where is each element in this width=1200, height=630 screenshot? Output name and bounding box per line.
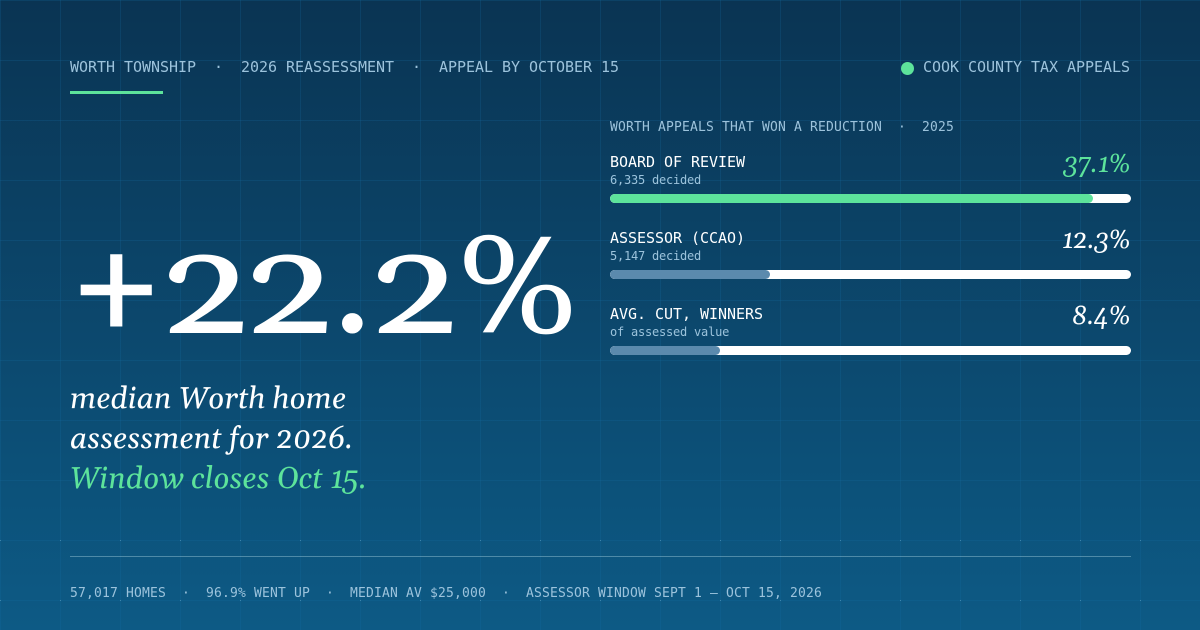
row 2 label: ASSESSOR (CCAO) bbox=[610, 229, 745, 247]
footer divider bbox=[70, 556, 1131, 557]
row 1 value: 37.1% bbox=[1063, 148, 1130, 181]
row 2 bar bbox=[610, 270, 1131, 279]
row 3 bar bbox=[610, 346, 1131, 355]
row 2 sublabel: 5,147 decided bbox=[610, 249, 701, 263]
status dot bbox=[901, 62, 914, 75]
header right text: COOK COUNTY TAX APPEALS bbox=[923, 58, 1130, 76]
headline stat: % bbox=[456, 205, 579, 380]
row 3 sublabel: of assessed value bbox=[610, 325, 729, 339]
accent rule bbox=[70, 91, 163, 94]
row 3 value: 8.4% bbox=[1072, 300, 1130, 333]
row 1 sublabel: 6,335 decided bbox=[610, 173, 701, 187]
headline stat: 2 bbox=[245, 211, 335, 378]
header left text: WORTH TOWNSHIP · 2026 REASSESSMENT · APPEAL BY OCTOBER 15 bbox=[70, 58, 619, 76]
row 1 label: BOARD OF REVIEW bbox=[610, 153, 745, 171]
headline stat bbox=[68, 194, 579, 384]
row 1 bar bbox=[610, 194, 1131, 203]
footer stats: 57,017 HOMES · 96.9% WENT UP · MEDIAN AV $25,000 · ASSESSOR WINDOW SEPT 1 – OCT 15, 2026 bbox=[70, 586, 822, 601]
headline stat: 2 bbox=[161, 211, 252, 378]
headline stat: 2 bbox=[369, 211, 460, 378]
headline stat: + . bbox=[68, 194, 372, 384]
row 3 label: AVG. CUT, WINNERS bbox=[610, 305, 763, 323]
subhead: median Worth home assessment for 2026. Window closes Oct 15. bbox=[70, 381, 367, 499]
row 2 value: 12.3% bbox=[1062, 224, 1130, 257]
chart title: WORTH APPEALS THAT WON A REDUCTION · 2025 bbox=[610, 120, 954, 135]
